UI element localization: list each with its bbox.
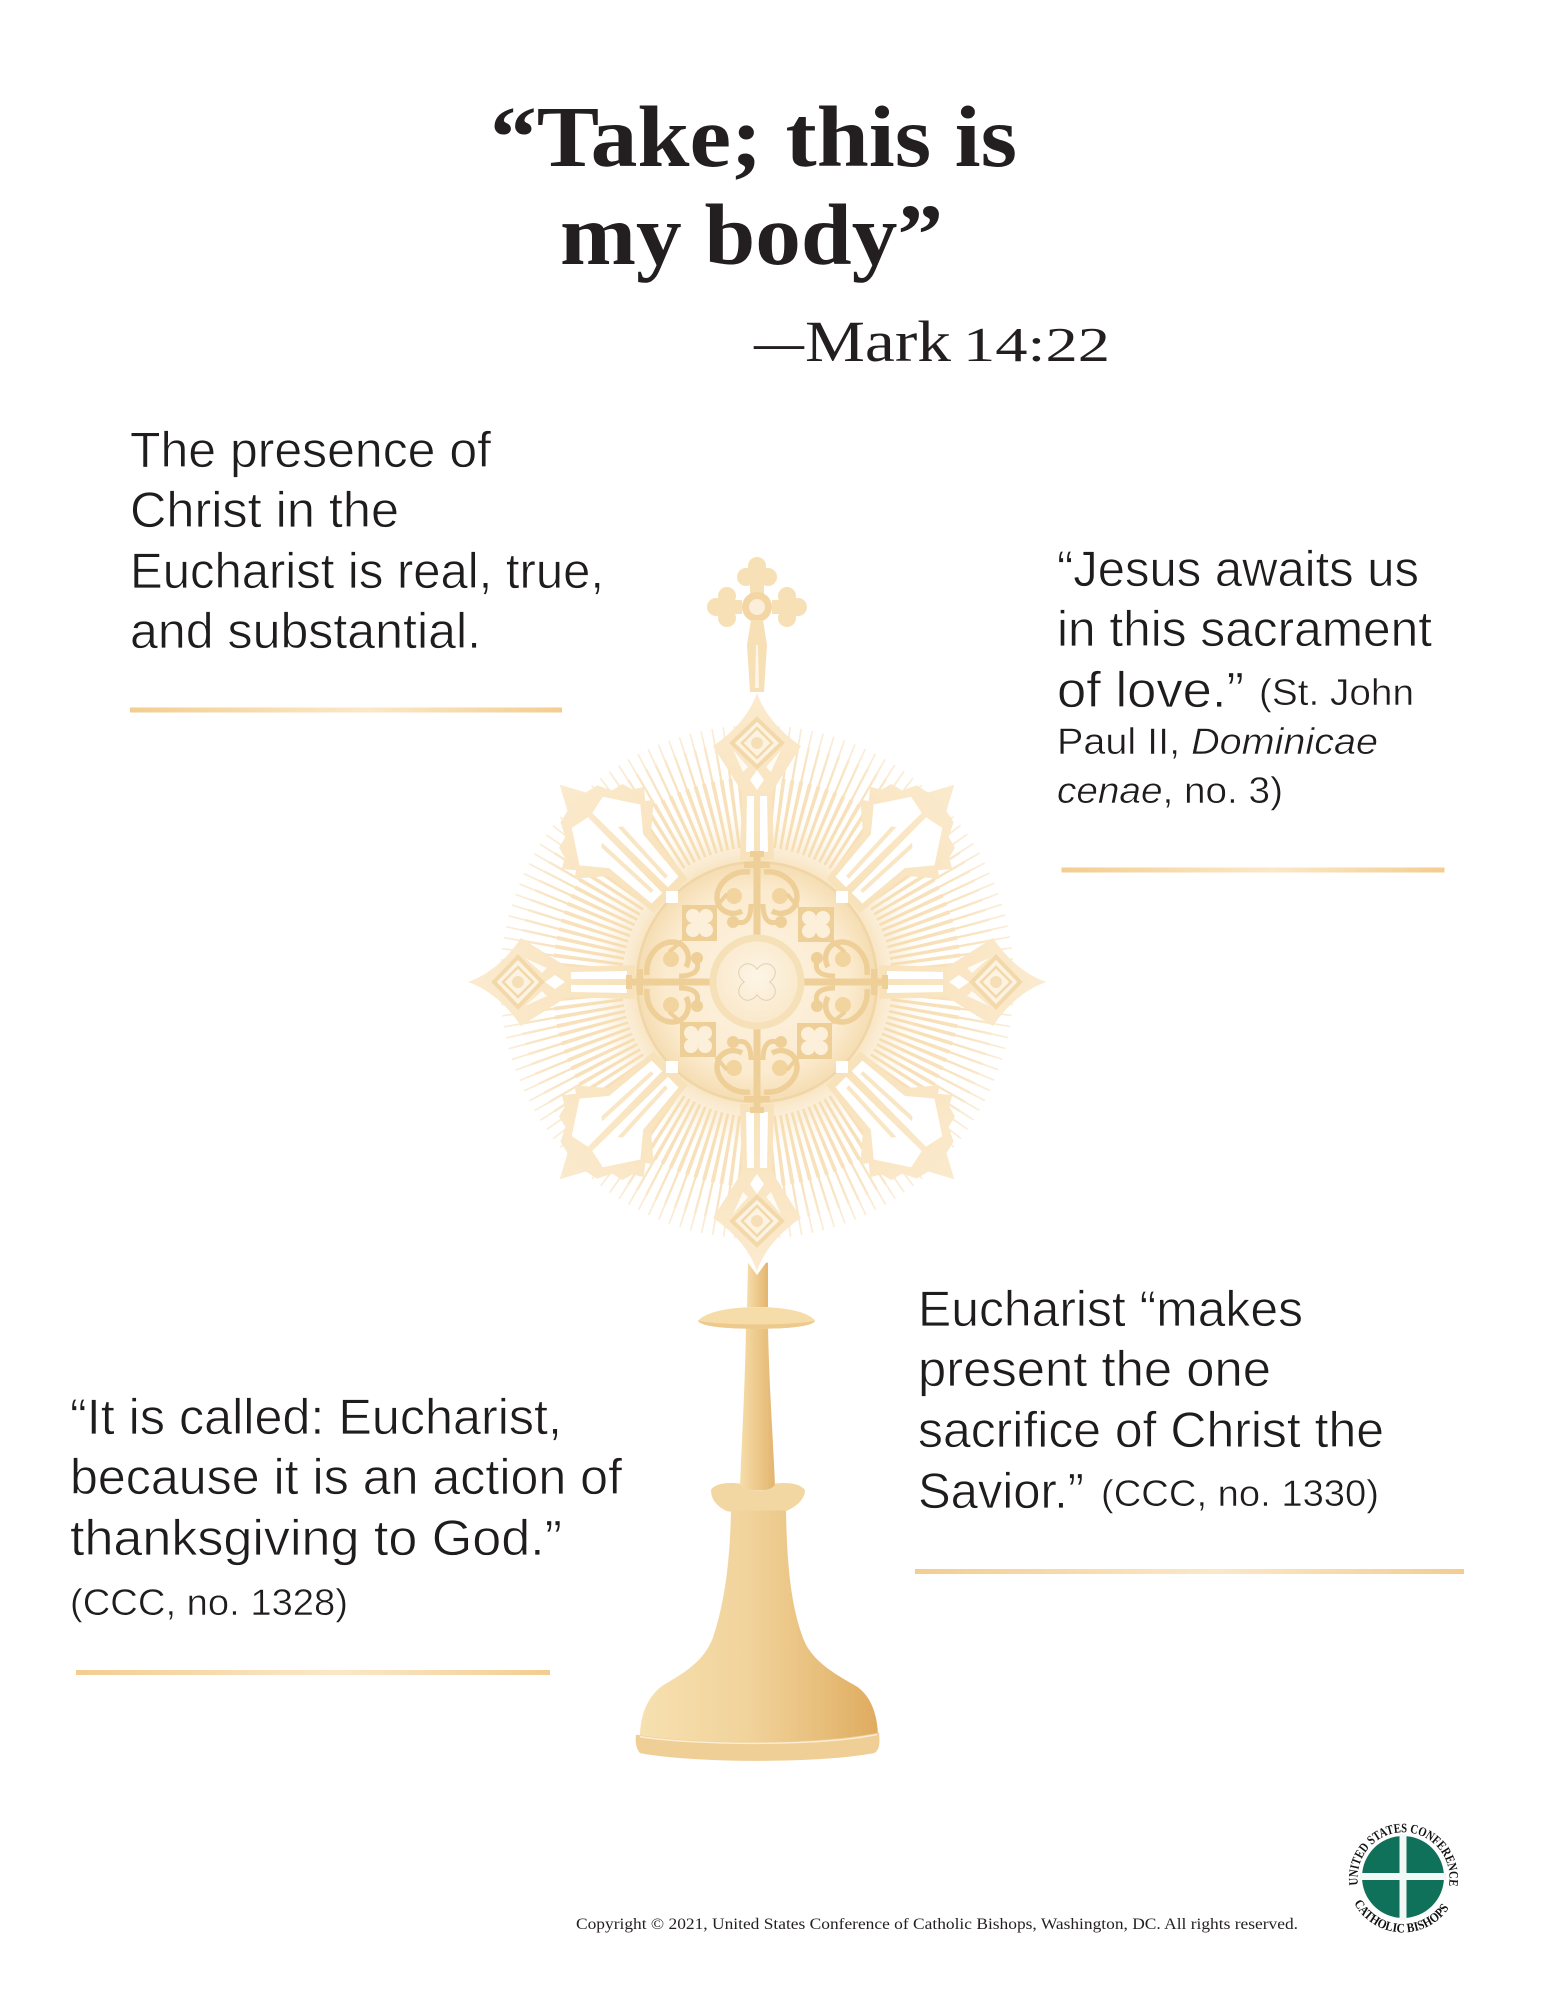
monstrance: top cross: [707, 557, 807, 692]
text block: Jesus awaits us: cenae, no. 3): [1057, 770, 1283, 811]
cardinal diamond arms: [468, 693, 1046, 1271]
scripture citation: 14:22: [963, 317, 1110, 372]
text block: real presence: Christ in the: [130, 482, 399, 538]
copyright notice: Copyright © 2021, United States Conference of Catholic Bishops, Washington, DC. All rights reserved.: [576, 1916, 1298, 1933]
text block: real presence: [130, 422, 604, 659]
title: my body”: [560, 186, 943, 283]
logo green cross emblem: [1360, 1834, 1446, 1920]
host: [713, 938, 801, 1026]
text block: Jesus awaits us: “Jesus awaits us: [1057, 541, 1419, 597]
text block: thanksgiving: because it is an action of: [70, 1449, 622, 1505]
logo ring text: UNITED STATES CONFERENCE OF: [1348, 1824, 1458, 1886]
divider rule: Jesus awaits us: [1062, 868, 1444, 872]
text block: Jesus awaits us: [1057, 541, 1432, 811]
text block: thanksgiving: [70, 1389, 622, 1623]
divider rule: makes present: [915, 1569, 1464, 1574]
scripture citation: —: [753, 309, 805, 374]
text block: makes present: (CCC, no. 1330): [1101, 1473, 1379, 1514]
text block: real presence: The presence of: [130, 422, 491, 478]
text block: thanksgiving: thanksgiving to God.”: [70, 1510, 562, 1566]
title: [490, 88, 1017, 283]
divider rule: real presence: [130, 708, 562, 712]
text block: Jesus awaits us: (St. John: [1259, 672, 1414, 713]
title: “Take; this is: [490, 88, 1017, 185]
diagonal arms: [519, 744, 995, 1220]
monstrance: stand: [636, 1263, 879, 1761]
filigree scrollwork: [629, 854, 885, 1110]
central disc: [637, 862, 877, 1102]
text block: makes present: present the one: [918, 1341, 1271, 1397]
text block: Jesus awaits us: in this sacrament: [1057, 601, 1432, 657]
text block: real presence: Eucharist is real, true,: [130, 543, 604, 599]
text block: makes present: Savior.”: [918, 1463, 1084, 1519]
logo: USCCB: CATHOLIC BISHOPS: [1356, 1900, 1448, 1933]
text block: thanksgiving: (CCC, no. 1328): [70, 1582, 348, 1623]
divider rule: thanksgiving: [76, 1670, 550, 1675]
text block: makes present: [918, 1281, 1384, 1519]
monstrance illustration: [468, 557, 1046, 1761]
corner squares: [666, 891, 848, 1073]
text block: makes present: Eucharist “makes: [918, 1281, 1303, 1337]
monstrance: sunburst rays and ornamented head: [468, 693, 1046, 1271]
text block: thanksgiving: “It is called: Eucharist,: [70, 1389, 562, 1445]
scripture citation: [753, 309, 1110, 374]
scripture citation: Mark: [805, 309, 951, 374]
text block: Jesus awaits us: Paul II, Dominicae: [1057, 721, 1378, 762]
text block: Jesus awaits us: of love.”: [1057, 662, 1244, 718]
text block: makes present: sacrifice of Christ the: [918, 1402, 1384, 1458]
text block: real presence: and substantial.: [130, 603, 481, 659]
